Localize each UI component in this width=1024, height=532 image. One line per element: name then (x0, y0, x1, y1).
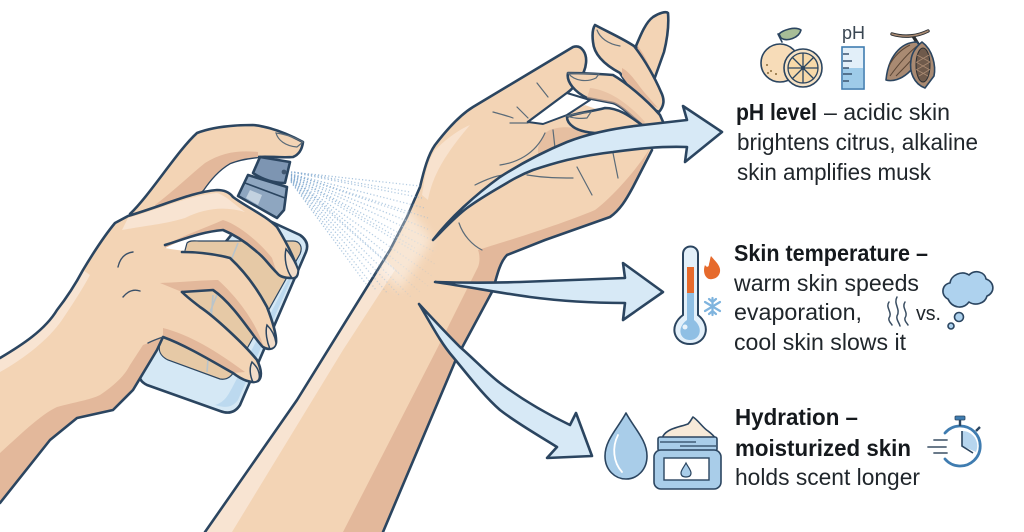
icon: water drop (605, 413, 647, 479)
text: skin temperature: Skin temperature – (734, 240, 928, 266)
text: skin temperature: warm skin speeds (733, 270, 919, 296)
finger gap (528, 93, 590, 124)
text: hydration: Hydration – (735, 404, 858, 430)
icon: cacao pods (886, 31, 935, 88)
palm creases (459, 83, 618, 250)
text: skin temperature: evaporation, (734, 299, 862, 325)
bottle liquid (159, 241, 301, 379)
arrow: to skin temperature (435, 263, 663, 320)
finger: little bent (567, 108, 642, 133)
arrow: to hydration (419, 304, 592, 458)
hand outlines (0, 190, 298, 358)
text: skin temperature: vs. (916, 303, 941, 325)
icon: steam (888, 297, 908, 326)
section: skin temperature (674, 240, 993, 355)
icon: thermometer (674, 246, 706, 344)
icon: flame (704, 256, 720, 279)
icon: citrus fruit (761, 28, 822, 87)
text: pH level (736, 99, 978, 185)
hand shading (0, 337, 163, 503)
icon: pH beaker (842, 23, 865, 89)
text: pH level: skin amplifies musk (737, 159, 931, 185)
arrow: to pH level (433, 106, 722, 240)
finger: ring (593, 25, 663, 112)
finger: thumb (130, 125, 303, 225)
icon: pH beaker: pH (842, 23, 865, 43)
spray mist (291, 172, 435, 298)
section: hydration (605, 404, 980, 490)
finger: pinky (634, 12, 668, 84)
finger: index (568, 73, 664, 125)
arm shading (343, 148, 650, 532)
arm and palm (205, 46, 663, 532)
bottle glass (140, 212, 307, 413)
text: hydration: holds scent longer (735, 464, 920, 490)
icon: cream jar (654, 417, 721, 489)
perfume bottle (130, 125, 307, 413)
icon: snowflake (705, 298, 720, 315)
bottle shine (215, 250, 304, 407)
knuckle creases (118, 252, 163, 343)
text: pH level: pH level (736, 99, 817, 125)
text: pH level: brightens citrus, alkaline (737, 129, 978, 155)
text: hydration: moisturized skin (735, 435, 911, 461)
text: skin temperature: cool skin slows it (734, 329, 906, 355)
spray cap (253, 157, 290, 183)
sprayed arm and hand (205, 12, 668, 532)
spray highlight on skin (378, 205, 432, 290)
icon: stopwatch (928, 416, 980, 466)
section: pH level (736, 23, 978, 185)
icon: cool cloud (943, 272, 993, 329)
fingernails (250, 249, 298, 382)
text: pH level: – acidic skin (824, 99, 950, 125)
neck and collar (238, 175, 287, 218)
text: hydration (735, 404, 920, 490)
spraying hand (0, 190, 298, 503)
bottle tube (207, 243, 238, 372)
text: skin temperature (733, 240, 941, 355)
